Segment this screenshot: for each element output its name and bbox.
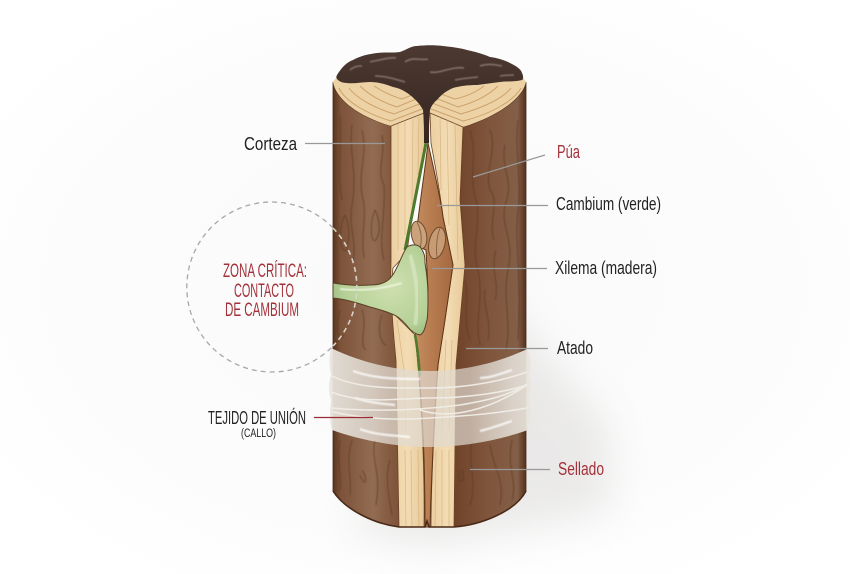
- label: tejido de union: [208, 407, 373, 440]
- wood fibres: [397, 116, 458, 527]
- growth rings: [339, 86, 521, 121]
- label: tejido de union: TEJIDO DE UNIÓN: [208, 407, 306, 428]
- label: tejido de union: (CALLO): [241, 428, 276, 440]
- xylem wedge: [415, 143, 453, 527]
- label: atado: Atado: [557, 338, 593, 358]
- label: pua: Púa: [557, 142, 581, 162]
- grafted trunk illustration: [329, 45, 531, 527]
- bark grain: [337, 115, 519, 515]
- pitch sealant: [336, 45, 523, 143]
- label: xilema: Xilema (madera): [555, 258, 657, 278]
- right wood strip (scion): [430, 113, 465, 527]
- label: pua: [473, 142, 581, 177]
- label: zona critica: DE CAMBIUM: [225, 300, 299, 321]
- label: atado: [466, 338, 593, 358]
- buds: [409, 220, 448, 260]
- label: zona critica: ZONA CRÍTICA:: [223, 261, 307, 282]
- critical zone dashed circle: [187, 202, 357, 372]
- cast shadow: [350, 300, 610, 545]
- label: corteza: Corteza: [244, 134, 298, 154]
- bandage wrap: [329, 348, 531, 447]
- label: sellado: Sellado: [558, 459, 604, 479]
- right bark: [454, 82, 526, 527]
- label: zona critica: [223, 261, 307, 321]
- bottom outline: [333, 491, 526, 527]
- label: cambium: Cambium (verde): [556, 194, 661, 214]
- top wood face: [333, 60, 526, 127]
- left wood strip (scion): [390, 113, 425, 527]
- cambium green line: [405, 143, 426, 250]
- left bark: [333, 82, 399, 527]
- label: sellado: [470, 459, 604, 479]
- callus tissue: [333, 245, 428, 335]
- label: zona critica: CONTACTO: [234, 281, 294, 302]
